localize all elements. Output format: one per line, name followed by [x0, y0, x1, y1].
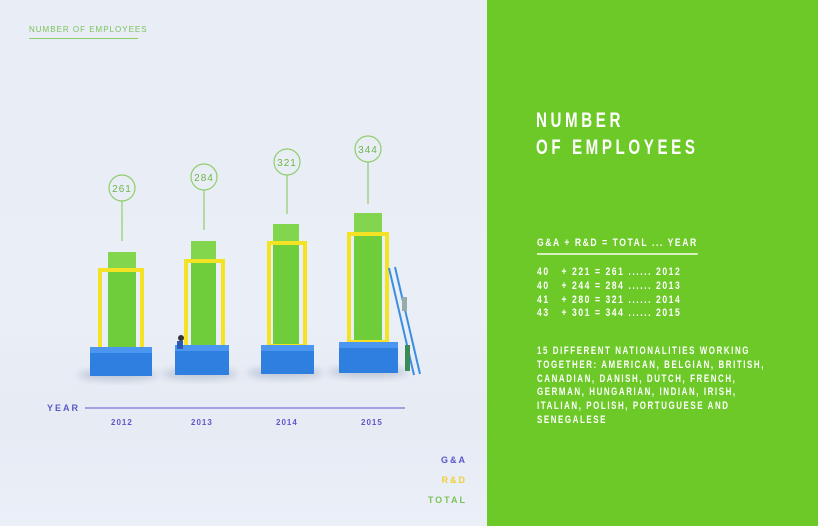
axis labels: [47, 403, 383, 427]
data table: G&A + R&D = TOTAL ... YEAR: [537, 237, 698, 249]
nationalities text: [537, 345, 765, 426]
text: YEAR: [47, 403, 80, 413]
text: 2014: [276, 418, 298, 427]
panel title: NUMBER: [536, 109, 624, 132]
bar 2012: [78, 175, 158, 380]
bar 2014: 321: [277, 158, 297, 169]
nationalities text: CANADIAN, DANISH, DUTCH, FRENCH,: [537, 373, 736, 385]
top-left label: [29, 25, 138, 39]
panel title: OF EMPLOYEES: [536, 136, 699, 159]
bar 2014: [247, 149, 323, 378]
top-left label: NUMBER OF EMPLOYEES: [29, 25, 148, 34]
data table: 40 + 221 = 261 ...... 2012 40 + 244 = 284 ...... 2013 41 + 280 = 321 ...... 2014 43 + 301 = 344 ...... 2015: [537, 266, 681, 319]
text: 2012: [111, 418, 133, 427]
panel title: [536, 109, 699, 159]
nationalities text: TOGETHER: AMERICAN, BELGIAN, BRITISH,: [537, 359, 765, 371]
legend: G&A: [441, 455, 467, 465]
legend: [428, 455, 467, 505]
bar 2015: 344: [358, 145, 378, 156]
bar chart: [78, 135, 421, 409]
legend: TOTAL: [428, 495, 467, 505]
text: 2015: [361, 418, 383, 427]
data table: [537, 237, 698, 319]
bar 2013: 284: [194, 173, 214, 184]
legend: R&D: [442, 475, 467, 485]
bar 2013: [162, 164, 238, 379]
nationalities text: SENEGALESE: [537, 414, 607, 426]
axis: [85, 407, 405, 409]
nationalities text: GERMAN, HUNGARIAN, INDIAN, IRISH,: [537, 386, 737, 398]
nationalities text: ITALIAN, POLISH, PORTUGUESE AND: [537, 400, 730, 412]
nationalities text: 15 DIFFERENT NATIONALITIES WORKING: [537, 345, 750, 357]
text: 2013: [191, 418, 213, 427]
bar 2012: 261: [112, 184, 132, 195]
bar 2015: [328, 136, 420, 377]
